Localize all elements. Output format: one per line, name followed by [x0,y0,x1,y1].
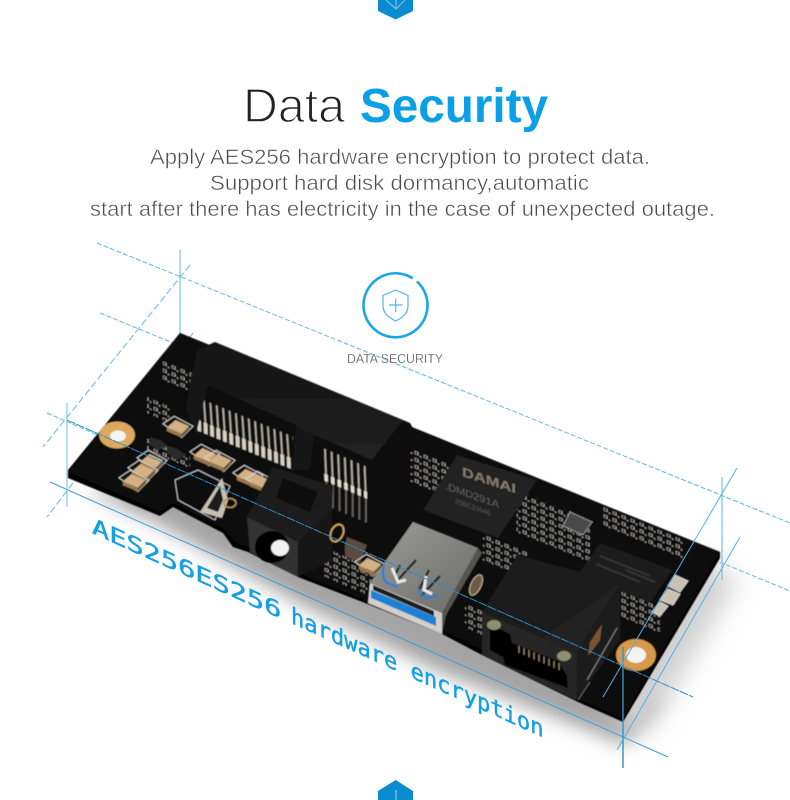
right capacitors [652,575,688,616]
DAMAI chip: 25BC21646 [455,498,490,518]
switch component [175,470,230,520]
description text [90,146,715,221]
connector inner pins [196,397,293,472]
connector side wall [186,382,208,434]
title: Data [243,80,345,133]
hardware encryption slanted caption [92,514,543,744]
circuit board [68,333,720,722]
DAMAI chip: .DMD291A [445,481,499,511]
description text: start after there has electricity in the case of unexpected outage. [90,198,715,221]
dimension lines over board [50,403,740,768]
title: Security [360,80,548,133]
small transistors [148,437,186,460]
DAMAI chip [423,455,537,538]
icon label: DATA SECURITY [347,351,443,366]
relay / flash chip [578,543,672,603]
description text: Apply AES256 hardware encryption to protect data. [150,146,650,169]
USB 3.0 port [368,522,482,634]
hardware encryption slanted caption: hardware encryption [291,602,543,744]
dimension lines behind board [43,243,790,591]
striped gold component [467,573,485,597]
gold oval pad [328,522,346,544]
board outline [68,333,720,722]
icon: top hexagon badge [378,0,413,20]
ethernet RJ45 port [482,555,620,700]
board shadow [85,490,738,745]
description text: Support hard disk dormancy,automatic [210,172,589,195]
SATA connector body [190,342,403,460]
connector latch [362,420,414,507]
inductor [345,537,367,563]
mounting hole right [616,639,656,671]
board top surface [68,333,720,718]
icon: bottom hexagon badge [378,780,413,800]
DC power jack [247,467,333,577]
silkscreen component clusters [147,360,683,636]
DAMAI chip: DAMAI [462,464,516,496]
title [243,80,548,133]
hardware encryption slanted caption: AES256ES256 [92,514,281,625]
mounting hole left [99,422,135,448]
capacitors [119,416,276,492]
QFN chip [563,512,592,535]
icon: shield in circle [361,271,430,339]
